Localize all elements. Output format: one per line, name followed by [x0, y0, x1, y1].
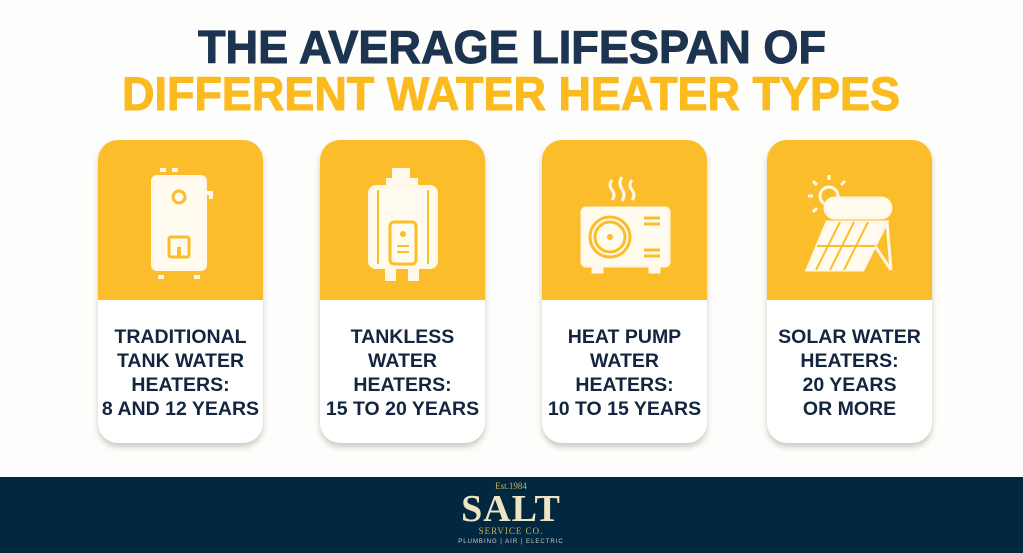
- text: solar: OR MORE: [803, 398, 896, 420]
- text: tankless: [326, 326, 479, 420]
- panel: solar: [767, 140, 932, 443]
- logo: SALT Service Co.: SERVICE CO.: [479, 526, 543, 536]
- icon: tankless heater: [368, 168, 438, 281]
- panel: traditional tank: [98, 140, 263, 443]
- panel: heat pump: [542, 140, 707, 443]
- panel: tankless: [320, 140, 485, 443]
- icon: heat pump: [580, 176, 670, 274]
- text: tankless: HEATERS:: [353, 374, 452, 396]
- text: solar: SOLAR WATER: [778, 326, 921, 348]
- text: solar: 20 YEARS: [803, 374, 896, 396]
- text: heat pump: [548, 326, 701, 420]
- logo: SALT Service Co.: [458, 481, 564, 545]
- text: tankless: 15 TO 20 YEARS: [326, 398, 479, 420]
- title: DIFFERENT WATER HEATER TYPES: [122, 67, 900, 120]
- logo: SALT Service Co.: PLUMBING | AIR | ELECTRIC: [458, 539, 564, 545]
- text: traditional: 8 AND 12 YEARS: [102, 398, 259, 420]
- icon: tank heater: [151, 168, 213, 279]
- text: heat pump: WATER: [590, 350, 659, 372]
- text: solar: [778, 326, 921, 420]
- text: tankless: WATER: [368, 350, 437, 372]
- logo: SALT Service Co.: Est.1984: [495, 481, 527, 491]
- icon: solar heater: [804, 175, 892, 272]
- footer: [0, 477, 1023, 553]
- text: heat pump: HEAT PUMP: [568, 326, 681, 348]
- title: THE AVERAGE LIFESPAN OF: [198, 21, 826, 73]
- text: heat pump: HEATERS:: [575, 374, 674, 396]
- logo: SALT Service Co.: SALT: [461, 488, 561, 530]
- text: traditional: HEATERS:: [131, 374, 230, 396]
- text: traditional: TANK WATER: [117, 350, 244, 372]
- text: solar: HEATERS:: [800, 350, 899, 372]
- text: tankless: TANKLESS: [351, 326, 454, 348]
- text: traditional: TRADITIONAL: [114, 326, 247, 348]
- title: [122, 21, 900, 120]
- text: traditional: [102, 326, 259, 420]
- text: heat pump: 10 TO 15 YEARS: [548, 398, 701, 420]
